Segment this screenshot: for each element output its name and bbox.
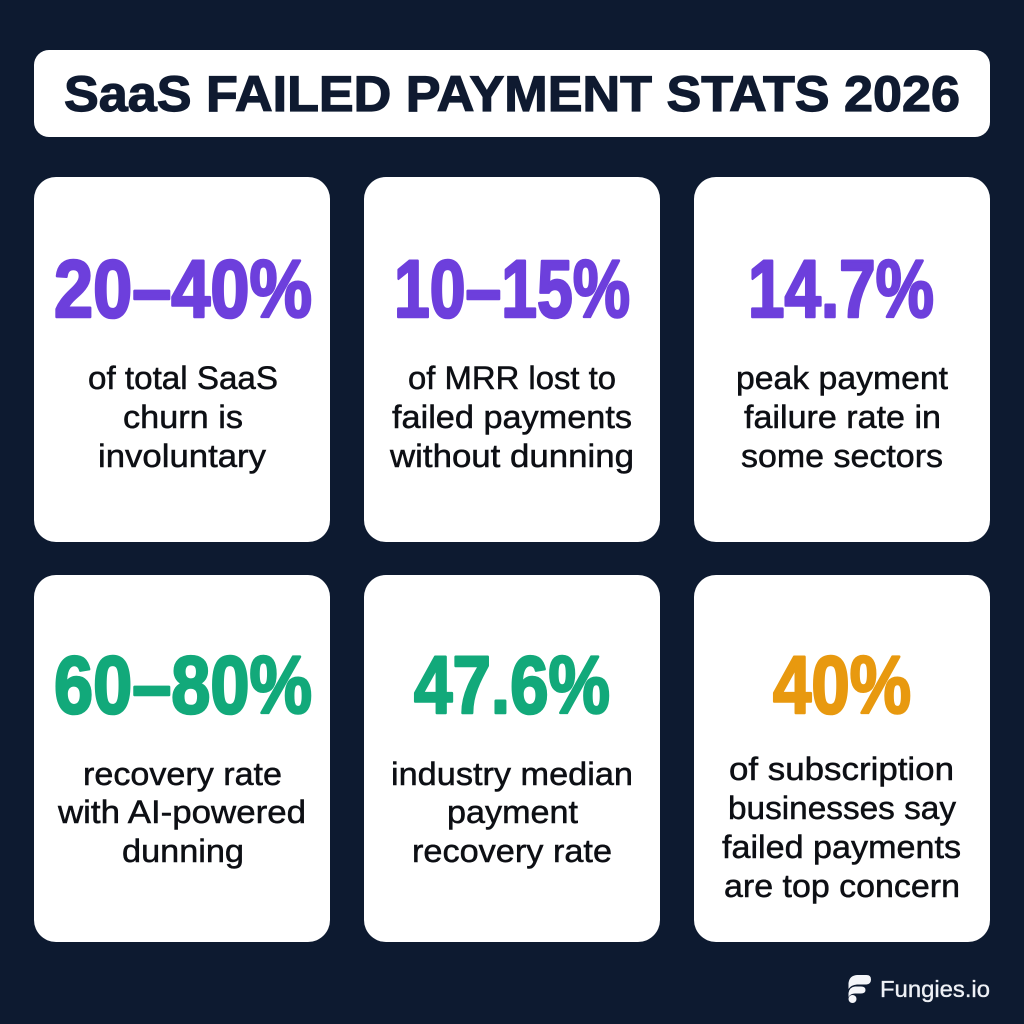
panel: MRR lost: 10–15% [394,244,630,335]
icon: Fungies logo mark [848,975,871,1003]
panel: MRR lost: without dunning [389,438,634,474]
panel: median recovery rate [364,575,660,942]
title banner [34,50,990,137]
brand logo [848,975,990,1003]
panel: top concern: are top concern [724,868,960,904]
panel: MRR lost: failed payments [392,399,632,435]
panel: AI recovery rate: with AI-powered [57,794,306,830]
panel: top concern: of subscription [729,751,954,787]
panel: peak failure rate: some sectors [741,438,943,474]
title banner: SaaS FAILED PAYMENT STATS 2026 [64,66,960,122]
panel: peak failure rate: peak payment [736,360,948,396]
panel: peak failure rate [694,177,990,542]
panel: MRR lost: of MRR lost to [408,360,616,396]
panel: AI recovery rate: dunning [122,833,244,869]
panel: median recovery rate: recovery rate [412,833,612,869]
panel: median recovery rate: payment [447,794,578,830]
panel: median recovery rate: industry median [391,756,633,792]
panel: AI recovery rate: recovery rate [83,756,282,792]
panel: involuntary churn [34,177,330,542]
panel: peak failure rate: 14.7% [748,244,934,335]
brand logo: Fungies.io [880,976,990,1002]
panel: AI recovery rate [34,575,330,942]
panel: median recovery rate: 47.6% [414,640,610,731]
panel: involuntary churn: churn is [123,399,243,435]
panel: involuntary churn: of total SaaS [88,360,278,396]
panel: AI recovery rate: 60–80% [54,640,312,731]
panel: MRR lost [364,177,660,542]
panel: top concern: 40% [773,640,911,731]
panel: involuntary churn: involuntary [98,438,266,474]
panel: peak failure rate: failure rate in [744,399,941,435]
panel: top concern [694,575,990,942]
panel: top concern: failed payments [722,829,961,865]
panel: top concern: businesses say [728,790,956,826]
panel: involuntary churn: 20–40% [54,244,312,335]
